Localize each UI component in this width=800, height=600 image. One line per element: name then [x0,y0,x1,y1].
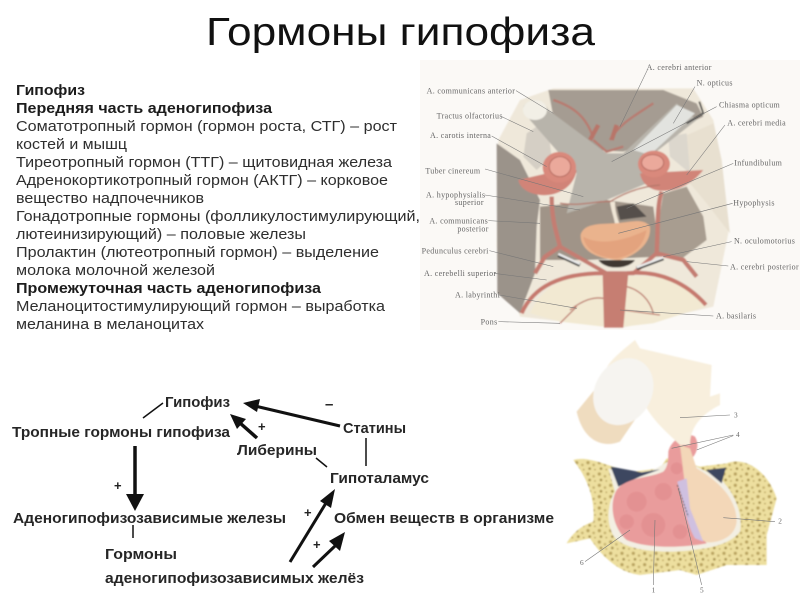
diagram labels [12,394,554,587]
diagram labels: Аденогипофизозависимые железы [13,510,286,527]
anatomical labels: A. communicans anterior [427,86,515,95]
anatomical labels: A. communicans [429,216,488,225]
pointer lines [485,70,733,323]
diagram connector lines [133,403,366,538]
signs: + [258,419,266,434]
diagram labels: Либерины [237,442,317,459]
anatomical labels: Pons [481,318,498,327]
title: Гормоны гипофиза [206,11,595,54]
diagram labels: Статины [343,420,406,437]
anatomical labels: Chiasma opticum [719,100,781,109]
anatomy shapes [497,88,730,328]
numbered labels: 2 [778,517,782,526]
arrow: gland hormones to hypothalamus [290,489,335,562]
arrow: liberins to pituitary [230,414,257,438]
text block: hormones of the pituitary: Гипофиз [16,82,85,99]
anatomical labels: A. hypophysialis [426,190,485,199]
text block: hormones of the pituitary: лютеинизирующий) – половые железы [16,226,306,243]
text block: hormones of the pituitary: Меланоцитостимулирующий гормон – выработка [16,298,386,315]
callout lines [585,415,775,585]
anatomy shapes [567,340,777,575]
anatomical labels [422,63,799,327]
text block: hormones of the pituitary: меланина в меланоцитах [16,316,205,333]
signs: + [313,537,321,552]
illustration: pituitary sagittal section [567,340,782,594]
diagram labels: Обмен веществ в организме [334,510,554,527]
text block: hormones of the pituitary: вещество надпочечников [16,190,204,207]
diagram labels: Гипофиз [165,394,230,411]
arrow: gland hormones to metabolism [313,532,345,567]
anatomical labels: N. oculomotorius [734,237,795,246]
diagram labels: Гормоны [105,546,177,563]
text block: hormones of the pituitary: Гонадотропные гормоны (фолликулостимулирующий, [16,208,420,225]
anatomical labels: A. cerebri anterior [647,63,712,72]
numbered labels: 5 [700,585,704,594]
numbered labels: 4 [736,430,740,439]
numbered labels: 1 [652,585,656,594]
anatomical labels: A. basilaris [716,312,756,321]
illustration: brain base arteries [420,60,800,330]
anatomical labels: N. opticus [697,78,733,87]
anatomical labels: Tuber cinereum [425,166,481,175]
anatomical labels: superior [455,198,484,207]
text block: hormones of the pituitary: Соматотропный гормон (гормон роста, СТГ) – рост [16,118,397,135]
numbered labels [580,411,782,594]
signs [114,396,333,552]
anatomical labels: A. cerebri media [727,118,786,127]
arrow: tropic hormones to glands [126,446,144,511]
diagram labels: аденогипофизозависимых желёз [105,570,364,587]
text block: hormones of the pituitary: молока молочной железой [16,262,215,279]
anatomical labels: A. carotis interna [430,131,491,140]
text block: hormones of the pituitary [16,82,420,333]
anatomical labels: A. labyrinthi [455,290,501,299]
signs: + [114,478,122,493]
signs: + [304,505,312,520]
diagram labels: Гипоталамус [330,470,429,487]
anatomical labels: Hypophysis [733,198,775,207]
anatomical labels: A. cerebelli superior [424,269,496,278]
anatomical labels: Tractus olfactorius [437,111,503,120]
anatomical labels: posterior [457,225,489,234]
text block: hormones of the pituitary: Тиреотропный гормон (ТТГ) – щитовидная железа [16,154,393,171]
text block: hormones of the pituitary: костей и мышц [16,136,127,153]
text block: hormones of the pituitary: Передняя часть аденогипофиза [16,100,273,117]
flow diagram: hormonal regulation [12,394,554,587]
anatomical labels: A. cerebri posterior [730,262,799,271]
anatomical labels: Pedunculus cerebri [422,246,489,255]
text block: hormones of the pituitary: Пролактин (лютеотропный гормон) – выделение [16,244,379,261]
numbered labels: 6 [580,558,584,567]
anatomical labels: Infundibulum [734,158,783,167]
signs: – [325,396,333,413]
arrow: statins to pituitary [243,399,340,426]
text block: hormones of the pituitary: Промежуточная часть аденогипофиза [16,280,322,297]
numbered labels: 3 [734,411,738,420]
text block: hormones of the pituitary: Адренокортикотропный гормон (АКТГ) – корковое [16,172,388,189]
diagram labels: Тропные гормоны гипофиза [12,424,231,441]
